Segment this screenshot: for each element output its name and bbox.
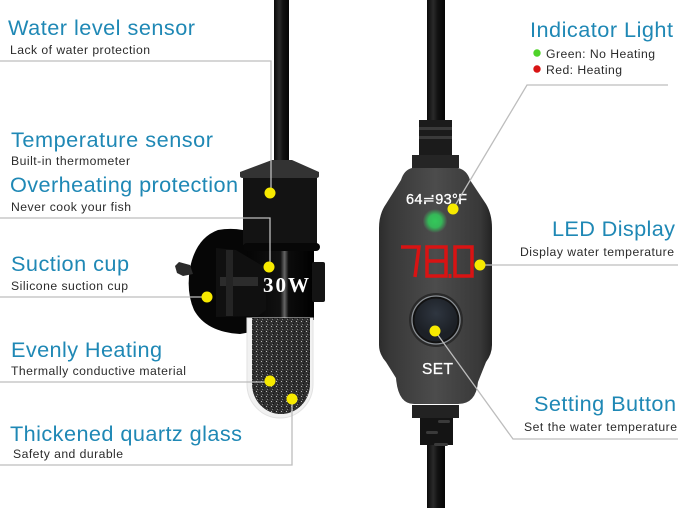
wattage label: 30W: [263, 273, 309, 297]
controller cable: [427, 0, 445, 125]
power cable: [274, 0, 289, 162]
label: indicator light: Indicator Light: [530, 17, 673, 42]
label: evenly heating: [11, 337, 186, 378]
label: suction cup: [11, 251, 129, 293]
label: overheating protection: Overheating protection: [10, 172, 238, 197]
quartz glass tube with sand: [247, 318, 313, 418]
label: temperature sensor: Built-in thermometer: [11, 154, 130, 168]
label: setting button: Setting Button: [534, 391, 676, 416]
set label: SET: [422, 361, 454, 378]
top strain relief: [412, 120, 459, 168]
collar ring: [243, 243, 320, 251]
top cap: [240, 160, 319, 178]
label: thickened quartz glass: [10, 421, 242, 461]
legend: green: Green: No Heating: [546, 47, 655, 61]
set button: [409, 293, 463, 347]
heater device: [175, 0, 325, 418]
label: suction cup: Silicone suction cup: [11, 279, 128, 293]
label: water level sensor: Lack of water protection: [10, 43, 150, 57]
LED digits 78.0: [401, 247, 472, 278]
label: thickened quartz glass: Thickened quartz glass: [10, 421, 242, 446]
label: evenly heating: Thermally conductive material: [11, 364, 186, 378]
label: suction cup: Suction cup: [11, 251, 129, 276]
clip bracket: [216, 248, 325, 317]
legend: red: Red: Heating: [546, 63, 622, 77]
green indicator: [423, 209, 447, 233]
upper body: [243, 175, 317, 245]
label: setting button: Set the water temperature: [524, 420, 677, 434]
label: LED display: LED Display: [552, 216, 675, 241]
controller body: [379, 168, 492, 404]
label: temperature sensor: [11, 127, 213, 168]
callout lines: [0, 61, 678, 465]
label: water level sensor: [8, 15, 195, 57]
label: setting button: [524, 391, 677, 434]
controller device: [379, 0, 492, 508]
label: temperature sensor: Temperature sensor: [11, 127, 213, 152]
label: LED display: Display water temperature: [520, 245, 674, 259]
temperature range label: 64≓93°F: [406, 192, 467, 208]
suction cup: [175, 229, 262, 334]
label: water level sensor: Water level sensor: [8, 15, 195, 40]
label: LED display: [520, 216, 675, 259]
label: indicator light: [530, 17, 673, 77]
label: evenly heating: Evenly Heating: [11, 337, 162, 362]
label: overheating protection: Never cook your fish: [11, 200, 131, 214]
bottom strain relief: [412, 405, 459, 446]
label: overheating protection: [10, 172, 238, 214]
lower tube: [247, 250, 314, 320]
label: thickened quartz glass: Safety and durable: [13, 447, 123, 461]
callout dots: [202, 188, 486, 404]
